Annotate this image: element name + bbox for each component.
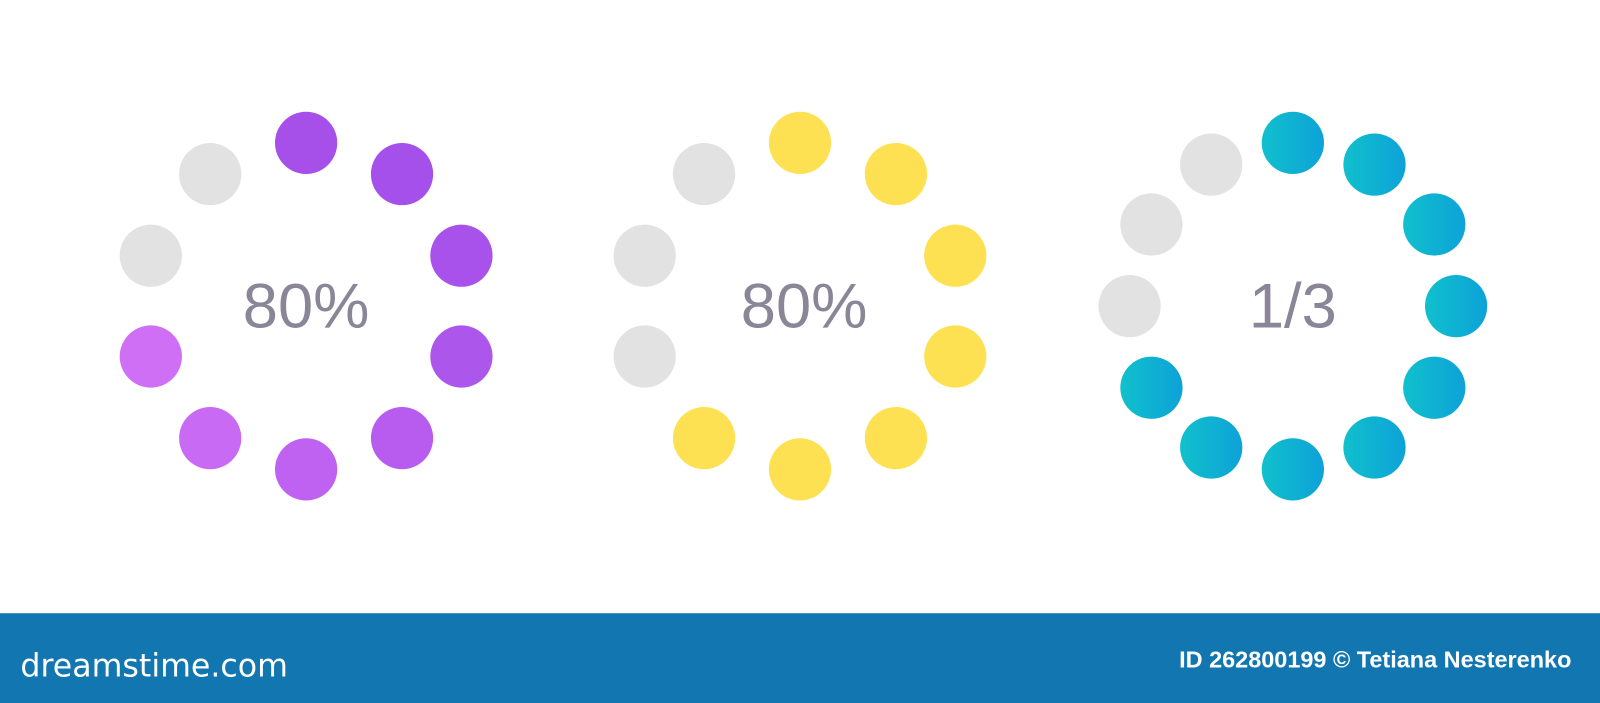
dots: purple ring [120,112,493,500]
chart: purple 80% [120,112,493,500]
footer: credit: ID 262800199 © Tetiana Nesterenko [1179,646,1571,672]
label: 80%: 80% [243,272,369,342]
footer: site name: dreamstime.com [20,648,288,684]
dots: yellow ring [614,112,986,500]
chart: yellow 80% [614,112,986,500]
chart: teal 1/3 [1098,112,1487,500]
dots: teal ring [1098,112,1487,500]
footer banner [0,613,1600,703]
label: 80%: 80% [741,272,867,342]
label: 1/3: 1/3 [1249,272,1337,342]
